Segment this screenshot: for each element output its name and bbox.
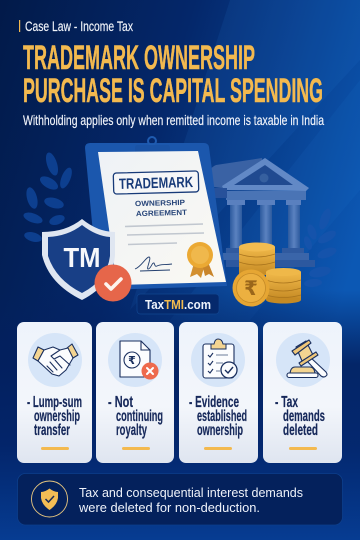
- card: evidence established ownership: established: [197, 408, 247, 425]
- icon: right laurel leaves: [302, 207, 338, 288]
- icon: checklist clipboard: [203, 339, 237, 378]
- website badge: [137, 294, 219, 314]
- trademark stamp box: TRADEMARK: [119, 174, 193, 193]
- signature: [135, 257, 172, 271]
- illustration: coin stacks with rupee coin: [232, 242, 301, 306]
- card: evidence established ownership: - Evidence: [189, 394, 239, 411]
- card: lump-sum ownership transfer: - Lump-sum: [27, 394, 82, 411]
- card: not continuing royalty: royalty: [116, 422, 147, 439]
- category tag: Case Law - Income Tax: [25, 19, 133, 34]
- card: not continuing royalty: continuing: [116, 408, 163, 425]
- agreement title: OWNERSHIP: [135, 198, 185, 208]
- card: tax demands deleted: deleted: [283, 422, 318, 439]
- card: tax demands deleted: [263, 322, 342, 463]
- card: lump-sum ownership transfer: [17, 322, 92, 463]
- agreement title: AGREEMENT: [136, 208, 187, 218]
- agreement title: [135, 198, 187, 218]
- title: [23, 39, 323, 110]
- trademark stamp box: [113, 171, 199, 194]
- card: tax demands deleted: demands: [283, 408, 325, 425]
- illustration: coin stacks with rupee coin: ₹: [244, 276, 258, 300]
- illustration: bank building: [207, 158, 315, 267]
- icon: handshake: [33, 344, 78, 376]
- card: evidence established ownership: ownership: [197, 422, 243, 439]
- card: not continuing royalty: - Not: [108, 394, 133, 411]
- callout: conclusion: were deleted for non-deduction.: [78, 501, 260, 515]
- icon: orange check badge: [94, 264, 132, 302]
- icon: TM shield: [42, 219, 115, 300]
- icon: rupee document with cross: ₹: [128, 354, 136, 367]
- card: tax demands deleted: - Tax: [275, 394, 298, 411]
- icon: gold seal: [187, 242, 214, 278]
- card: lump-sum ownership transfer: ownership: [34, 408, 80, 425]
- icon: left laurel leaves: [22, 151, 74, 244]
- callout: conclusion: [18, 474, 342, 525]
- icon: gavel: [287, 340, 327, 378]
- callout: conclusion: Tax and consequential interest demands: [79, 486, 303, 500]
- card: evidence established ownership: [179, 322, 258, 463]
- card: lump-sum ownership transfer: transfer: [34, 422, 70, 439]
- website badge: TaxTMI.com: [145, 297, 211, 312]
- icon: TM shield: TM: [64, 242, 100, 273]
- icon: rupee document with cross: [120, 341, 158, 380]
- card: not continuing royalty: [96, 322, 174, 463]
- illustration: clipboard agreement: [85, 137, 227, 290]
- icon: gold shield check: [32, 481, 68, 517]
